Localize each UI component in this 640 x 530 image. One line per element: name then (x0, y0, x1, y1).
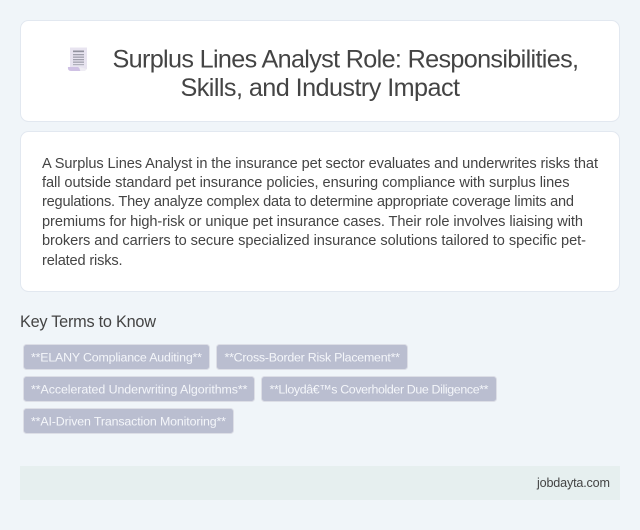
description text: premiums for high-risk or unique pet insurance cases. Their role involves liaising with (42, 214, 583, 230)
chip: Accelerated Underwriting Algorithms: **Accelerated Underwriting Algorithms** (31, 382, 248, 396)
panel: header card (20, 20, 620, 122)
description text: regulations. They analyze complex data to determine appropriate coverage limits and (42, 194, 574, 210)
description text: brokers and carriers to secure specialized insurance solutions tailored to specific pet- (42, 233, 586, 249)
chip: ELANY Compliance Auditing: **ELANY Compliance Auditing** (31, 350, 202, 364)
chip: Accelerated Underwriting Algorithms (24, 376, 254, 402)
description text (42, 156, 598, 269)
panel: description card (20, 132, 620, 292)
heading: key terms: Key Terms to Know (20, 313, 156, 331)
description text: related risks. (42, 253, 122, 269)
chip: AI-Driven Transaction Monitoring (24, 408, 234, 434)
title: Surplus Lines Analyst Role: Responsibilities, (112, 46, 579, 74)
title (112, 46, 579, 102)
description text: A Surplus Lines Analyst in the insurance pet sector evaluates and underwrites risks that (42, 156, 598, 172)
description text: fall outside standard pet insurance policies, ensuring compliance with surplus lines (42, 175, 570, 191)
chip: AI-Driven Transaction Monitoring: **AI-Driven Transaction Monitoring** (31, 414, 226, 428)
title: Skills, and Industry Impact (180, 74, 460, 102)
chip: Lloyd's Coverholder Due Diligence: **Lloydâ€™s Coverholder Due Diligence** (270, 382, 489, 396)
chip: ELANY Compliance Auditing (24, 344, 210, 370)
footer text: jobdayta.com (536, 476, 610, 490)
chip: Lloyd's Coverholder Due Diligence (262, 376, 496, 402)
key terms chips (24, 344, 496, 434)
chip: Cross-Border Risk Placement (216, 344, 408, 370)
icon: scroll document (68, 48, 87, 71)
footer bar (20, 466, 620, 500)
chip: Cross-Border Risk Placement: **Cross-Border Risk Placement** (224, 350, 400, 364)
